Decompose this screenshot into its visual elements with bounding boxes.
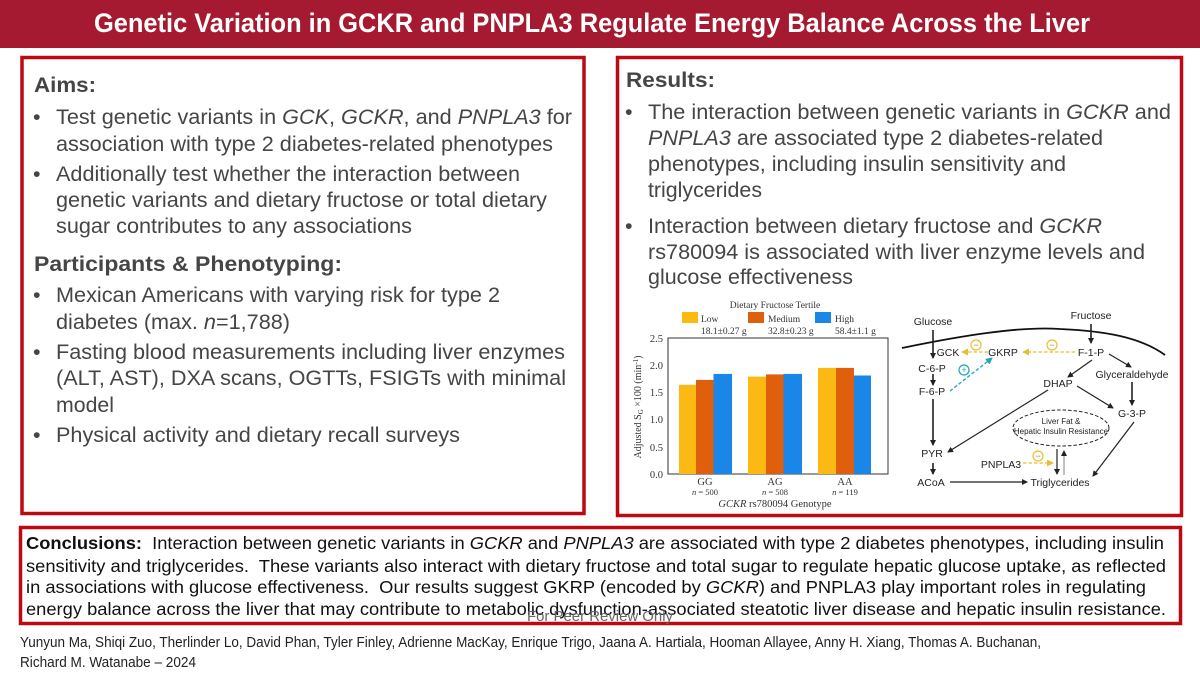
chart legend: 32.8±0.23 g	[768, 327, 814, 337]
heading: participants and phenotyping: Participants & Phenotyping:	[34, 252, 342, 276]
x axis: GCKR rs780094 Genotype	[718, 499, 832, 510]
pathway diagram: −	[1049, 340, 1055, 350]
bullet: fasting blood measurements: •	[33, 340, 41, 364]
pathway diagram: G-3-P	[1118, 408, 1146, 420]
pathway diagram: −	[973, 340, 979, 350]
x axis: GG	[697, 477, 713, 488]
bullet: GCKR and PNPLA3 interaction: The interaction between genetic variants in GCKR and	[648, 100, 1171, 124]
bullet: Mexican Americans	[33, 283, 500, 334]
chart legend: 58.4±1.1 g	[835, 327, 876, 337]
pathway diagram: GCK	[937, 347, 959, 359]
bullet: GCKR and PNPLA3 interaction	[625, 100, 1171, 202]
panel: conclusions: sensitivity and triglycerides. These variants also interact with dietary fructose and total sugar to regulate hepatic glucose uptake, as reflected	[26, 556, 1166, 576]
pathway diagram: C-6-P	[918, 363, 946, 375]
authors: Richard M. Watanabe – 2024	[20, 655, 196, 671]
bullet: physical activity: Physical activity and dietary recall surveys	[56, 423, 460, 447]
pathway diagram	[902, 310, 1169, 489]
x axis: n = 119	[832, 487, 858, 497]
x axis	[692, 477, 858, 510]
bullet: dietary fructose interaction: Interaction between dietary fructose and GCKR	[648, 214, 1102, 238]
chart legend: Medium	[768, 315, 801, 325]
bullet: test genetic variants: association with type 2 diabetes-related phenotypes	[56, 132, 553, 156]
pathway diagram: +	[961, 365, 967, 375]
bullet: fasting blood measurements: (ALT, AST), DXA scans, OGTTs, FSIGTs with minimal	[56, 366, 566, 390]
pathway diagram: −	[1035, 451, 1041, 461]
bullet: dietary fructose interaction: rs780094 is associated with liver enzyme levels and	[648, 240, 1145, 264]
pathway diagram: ACoA	[917, 477, 945, 489]
title banner: Genetic Variation in GCKR and PNPLA3 Regulate Energy Balance Across the Liver	[94, 8, 1090, 38]
chart legend: High	[835, 315, 854, 325]
title banner	[0, 0, 1200, 48]
panel: results	[618, 58, 1182, 516]
bars	[679, 368, 871, 474]
heading: aims: Aims:	[34, 73, 96, 97]
bullet: Mexican Americans: diabetes (max. n=1,788)	[56, 310, 290, 334]
y axis: 2.5	[650, 334, 663, 345]
x axis: AG	[767, 477, 783, 488]
pathway diagram: Fructose	[1071, 310, 1112, 322]
liver fat ellipse	[1013, 410, 1109, 446]
y axis: )	[633, 356, 644, 359]
chart legend	[682, 301, 876, 337]
panel: aims and participants	[22, 58, 584, 514]
bullet: test genetic variants: •	[33, 105, 41, 129]
bullet: GCKR and PNPLA3 interaction: PNPLA3 are associated type 2 diabetes-related	[648, 126, 1103, 150]
y axis: 2.0	[650, 361, 663, 372]
chart legend: 18.1±0.27 g	[701, 327, 747, 337]
x axis: n = 500	[692, 487, 718, 497]
y axis: G	[637, 409, 645, 414]
bullet: dietary interaction: •	[33, 162, 41, 186]
y axis: 1.5	[650, 388, 663, 399]
authors	[20, 635, 1041, 671]
bullet: test genetic variants: Test genetic variants in GCK, GCKR, and PNPLA3 for	[56, 105, 572, 129]
bullet: Mexican Americans: •	[33, 283, 41, 307]
chart legend: Dietary Fructose Tertile	[730, 301, 820, 311]
pathway diagram: DHAP	[1043, 378, 1073, 390]
bullet: fasting blood measurements: Fasting blood measurements including liver enzymes	[56, 340, 565, 364]
bullet: fasting blood measurements	[33, 340, 566, 417]
bullet: dietary fructose interaction	[625, 214, 1145, 289]
watermark: for peer review only: For Peer Review Only	[527, 608, 673, 625]
x axis: n = 508	[762, 487, 788, 497]
bullet: GCKR and PNPLA3 interaction: triglycerides	[648, 178, 762, 202]
pathway diagram: F-6-P	[919, 386, 945, 398]
chart legend: Low	[701, 315, 719, 325]
x axis: AA	[837, 477, 853, 488]
bullet: GCKR and PNPLA3 interaction: •	[625, 100, 633, 124]
y axis	[632, 334, 663, 481]
liver fat ellipse: Liver Fat &	[1042, 417, 1081, 426]
bullet: dietary interaction: sugar contributes to any associations	[56, 214, 412, 238]
panel: conclusions: in associations with glucose effectiveness. Our results suggest GKRP (encoded by GCKR) and PNPLA3 play important roles in regulating	[26, 577, 1146, 597]
pathway diagram: Triglycerides	[1030, 477, 1090, 489]
liver fat ellipse: Hepatic Insulin Resistance	[1014, 427, 1109, 436]
bullet: Mexican Americans: Mexican Americans with varying risk for type 2	[56, 283, 500, 307]
bullet: dietary interaction	[33, 162, 547, 238]
pathway diagram: F-1-P	[1078, 347, 1104, 359]
pathway diagram: PNPLA3	[981, 459, 1021, 471]
pathway diagram: PYR	[921, 448, 943, 460]
authors: Yunyun Ma, Shiqi Zuo, Therlinder Lo, David Phan, Tyler Finley, Adrienne MacKay, Enrique Trigo, Jaana A. Hartiala, Hooman Allayee, Anny H. Xiang, Thomas A. Buchanan,	[20, 635, 1041, 651]
bullet: test genetic variants	[33, 105, 572, 156]
heading: results: Results:	[626, 68, 715, 92]
panel: conclusions	[20, 528, 1180, 624]
bullet: dietary fructose interaction: •	[625, 214, 633, 238]
bullet: fasting blood measurements: model	[56, 393, 114, 417]
panel: conclusions: Conclusions: Interaction between genetic variants in GCKR and PNPLA3 are associated with type 2 diabetes phenotypes, including insulin	[26, 533, 1164, 553]
panel: conclusions: energy balance across the liver that may contribute to metabolic dysfunction-associated steatotic liver disease and hepatic insulin resistance.	[26, 599, 1166, 619]
bullet: dietary interaction: genetic variants and dietary fructose or total dietary	[56, 188, 547, 212]
bullet: physical activity: •	[33, 423, 41, 447]
bullet: dietary fructose interaction: glucose effectiveness	[648, 265, 853, 289]
pathway diagram: Glucose	[914, 316, 952, 328]
pathway diagram: Glyceraldehyde	[1096, 369, 1169, 381]
y axis: 0.0	[650, 470, 663, 481]
pathway diagram: GKRP	[988, 347, 1018, 359]
y axis: ×100 (min	[633, 365, 644, 409]
y axis: -1	[632, 358, 640, 365]
y axis: Adjusted S	[633, 414, 644, 458]
y axis: 1.0	[650, 415, 663, 426]
y axis: 0.5	[650, 443, 663, 454]
bar chart: adjusted SG by genotype and fructose tertile	[632, 301, 888, 510]
bullet: dietary interaction: Additionally test whether the interaction between	[56, 162, 520, 186]
bullet: GCKR and PNPLA3 interaction: phenotypes, including insulin sensitivity and	[648, 152, 1066, 176]
